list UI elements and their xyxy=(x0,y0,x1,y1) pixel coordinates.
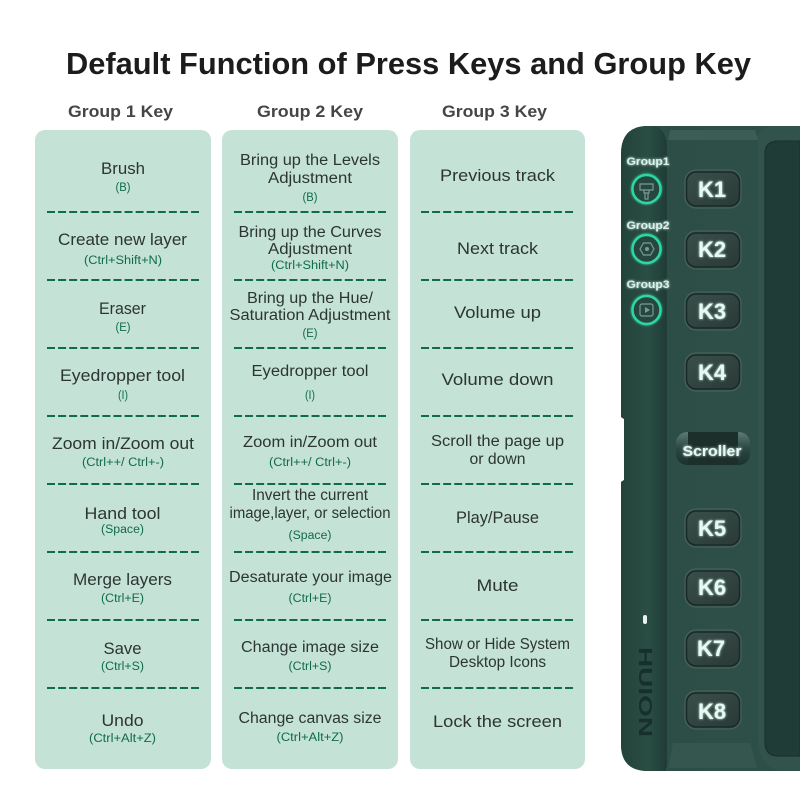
key list xyxy=(425,167,570,731)
indicator: Group3: Group3 xyxy=(626,279,670,291)
key list: Adjustment xyxy=(268,170,353,187)
key list xyxy=(52,160,194,745)
indicator light xyxy=(643,615,647,624)
key K2 xyxy=(685,231,741,269)
indicator: Group1: Group1 xyxy=(626,156,670,168)
key list: (E) xyxy=(116,322,131,334)
key list: (E) xyxy=(302,328,318,340)
key list: (Ctrl++/ Ctrl+-) xyxy=(269,457,351,469)
key list: Zoom in/Zoom out xyxy=(243,434,378,451)
key list: Eyedropper tool xyxy=(60,367,185,385)
key list: (B) xyxy=(302,192,318,204)
key list: Change canvas size xyxy=(238,710,382,727)
device: tablet with keys xyxy=(621,126,800,771)
key K4: K4 xyxy=(698,360,727,385)
key K7: K7 xyxy=(697,636,725,661)
key list: Merge layers xyxy=(73,571,172,589)
key list: (Space) xyxy=(288,530,332,542)
key list: Save xyxy=(104,640,142,658)
key K1: K1 xyxy=(698,177,726,202)
key list: Invert the current xyxy=(252,487,369,504)
key list: Bring up the Curves xyxy=(238,224,382,241)
key K6 xyxy=(685,569,741,607)
key list: Mute xyxy=(476,577,518,595)
panel background xyxy=(410,130,585,769)
panel: Group 1 Key xyxy=(35,102,211,769)
key list: Create new layer xyxy=(58,231,188,249)
key list: Adjustment xyxy=(268,241,353,258)
scroller xyxy=(676,432,750,465)
key K2: K2 xyxy=(698,237,726,262)
brand logo: HUION xyxy=(635,647,655,737)
indicator: Group2: Group2 xyxy=(626,220,670,232)
panel: Group 2 Key xyxy=(222,102,398,769)
key K5 xyxy=(685,509,741,547)
dividers xyxy=(421,212,574,688)
key list: Bring up the Hue/ xyxy=(247,290,374,307)
key list: (B) xyxy=(116,182,131,194)
screen xyxy=(765,141,800,756)
key K5: K5 xyxy=(698,516,726,541)
key list: Desaturate your image xyxy=(229,569,392,586)
key list: Undo xyxy=(102,712,144,730)
key list: Desktop Icons xyxy=(449,654,546,671)
heading: Group 2 Key: Group 2 Key xyxy=(257,102,364,121)
key list: or down xyxy=(470,451,526,468)
group indicators xyxy=(626,156,670,324)
key K3 xyxy=(685,292,741,330)
key list: Zoom in/Zoom out xyxy=(52,435,194,453)
key list: Play/Pause xyxy=(456,509,539,527)
key list: Lock the screen xyxy=(433,713,562,731)
indicator: Group1 xyxy=(626,156,670,203)
key list: Change image size xyxy=(241,639,379,656)
key list: Brush xyxy=(101,160,145,178)
key list: (Ctrl+Alt+Z) xyxy=(89,733,156,745)
key list xyxy=(229,152,392,744)
press keys xyxy=(676,170,750,729)
indicator: Group2 xyxy=(626,220,670,263)
key list: Hand tool xyxy=(84,505,160,523)
key list: Previous track xyxy=(440,167,556,185)
key list: Volume down xyxy=(442,371,554,389)
indicator: Group3 xyxy=(626,279,670,324)
panel background xyxy=(35,130,211,769)
title: Default Function of Press Keys and Group Key xyxy=(66,47,751,81)
key K8 xyxy=(685,691,741,729)
left edge strip xyxy=(621,126,666,771)
key K8: K8 xyxy=(698,699,726,724)
key list: (Ctrl+S) xyxy=(288,661,332,673)
side rail xyxy=(758,126,800,771)
key list: image,layer, or selection xyxy=(230,505,390,522)
dividers xyxy=(234,212,386,688)
key K7 xyxy=(685,630,741,668)
key list: (Ctrl+Shift+N) xyxy=(271,260,349,272)
key list: Scroll the page up xyxy=(431,433,564,450)
key list: (Ctrl+E) xyxy=(101,593,144,605)
key K3: K3 xyxy=(698,299,726,324)
key list: (I) xyxy=(305,390,315,402)
key list: Next track xyxy=(457,240,539,258)
key K1 xyxy=(685,170,741,208)
dividers xyxy=(47,212,199,688)
heading: Group 3 Key: Group 3 Key xyxy=(442,102,548,121)
key list: (Ctrl+Shift+N) xyxy=(84,255,162,267)
key list: (I) xyxy=(118,390,128,402)
key list: Eraser xyxy=(99,300,146,318)
device body xyxy=(621,126,800,771)
panel: Group 3 Key xyxy=(410,102,585,769)
key list: (Ctrl++/ Ctrl+-) xyxy=(82,457,164,469)
heading: Group 1 Key: Group 1 Key xyxy=(68,102,174,121)
key K6: K6 xyxy=(698,575,726,600)
key list: Saturation Adjustment xyxy=(230,307,391,324)
key list: Volume up xyxy=(454,304,541,322)
scroller: Scroller xyxy=(682,443,742,460)
panel background xyxy=(222,130,398,769)
key list: (Ctrl+S) xyxy=(101,661,144,673)
key K4 xyxy=(685,353,741,391)
key list: Bring up the Levels xyxy=(240,152,380,169)
key list: (Ctrl+E) xyxy=(288,593,332,605)
key list: Show or Hide System xyxy=(425,636,570,653)
key list: Eyedropper tool xyxy=(252,363,368,380)
key list: (Ctrl+Alt+Z) xyxy=(276,732,344,744)
key list: (Space) xyxy=(101,524,144,536)
